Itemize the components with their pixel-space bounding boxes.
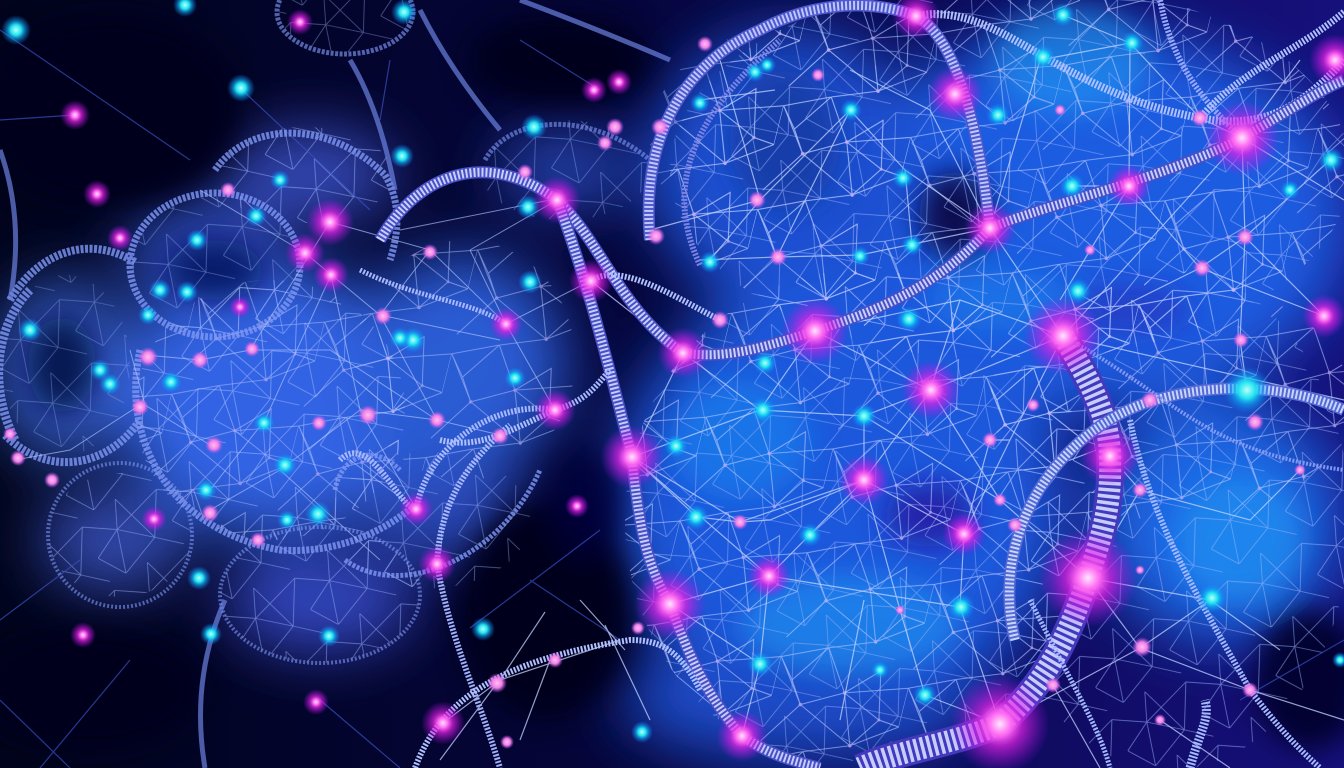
ring outlines: left strands: [0, 0, 670, 768]
ring outlines: left cluster: [0, 0, 650, 663]
tube: right vertical thick: [860, 336, 1110, 768]
tube: central wave: [380, 80, 1344, 355]
tube strands: main network: [340, 0, 1344, 768]
tube: inner upper arch: [684, 0, 1344, 265]
tube: upper left arch: [649, 5, 990, 240]
tube: central descending: [557, 200, 820, 768]
thin mesh: right network: [440, 15, 1344, 768]
tube: secondary wave: [340, 270, 720, 768]
tube: right arc: [1009, 336, 1344, 768]
thin mesh: left cluster: [15, 190, 590, 560]
